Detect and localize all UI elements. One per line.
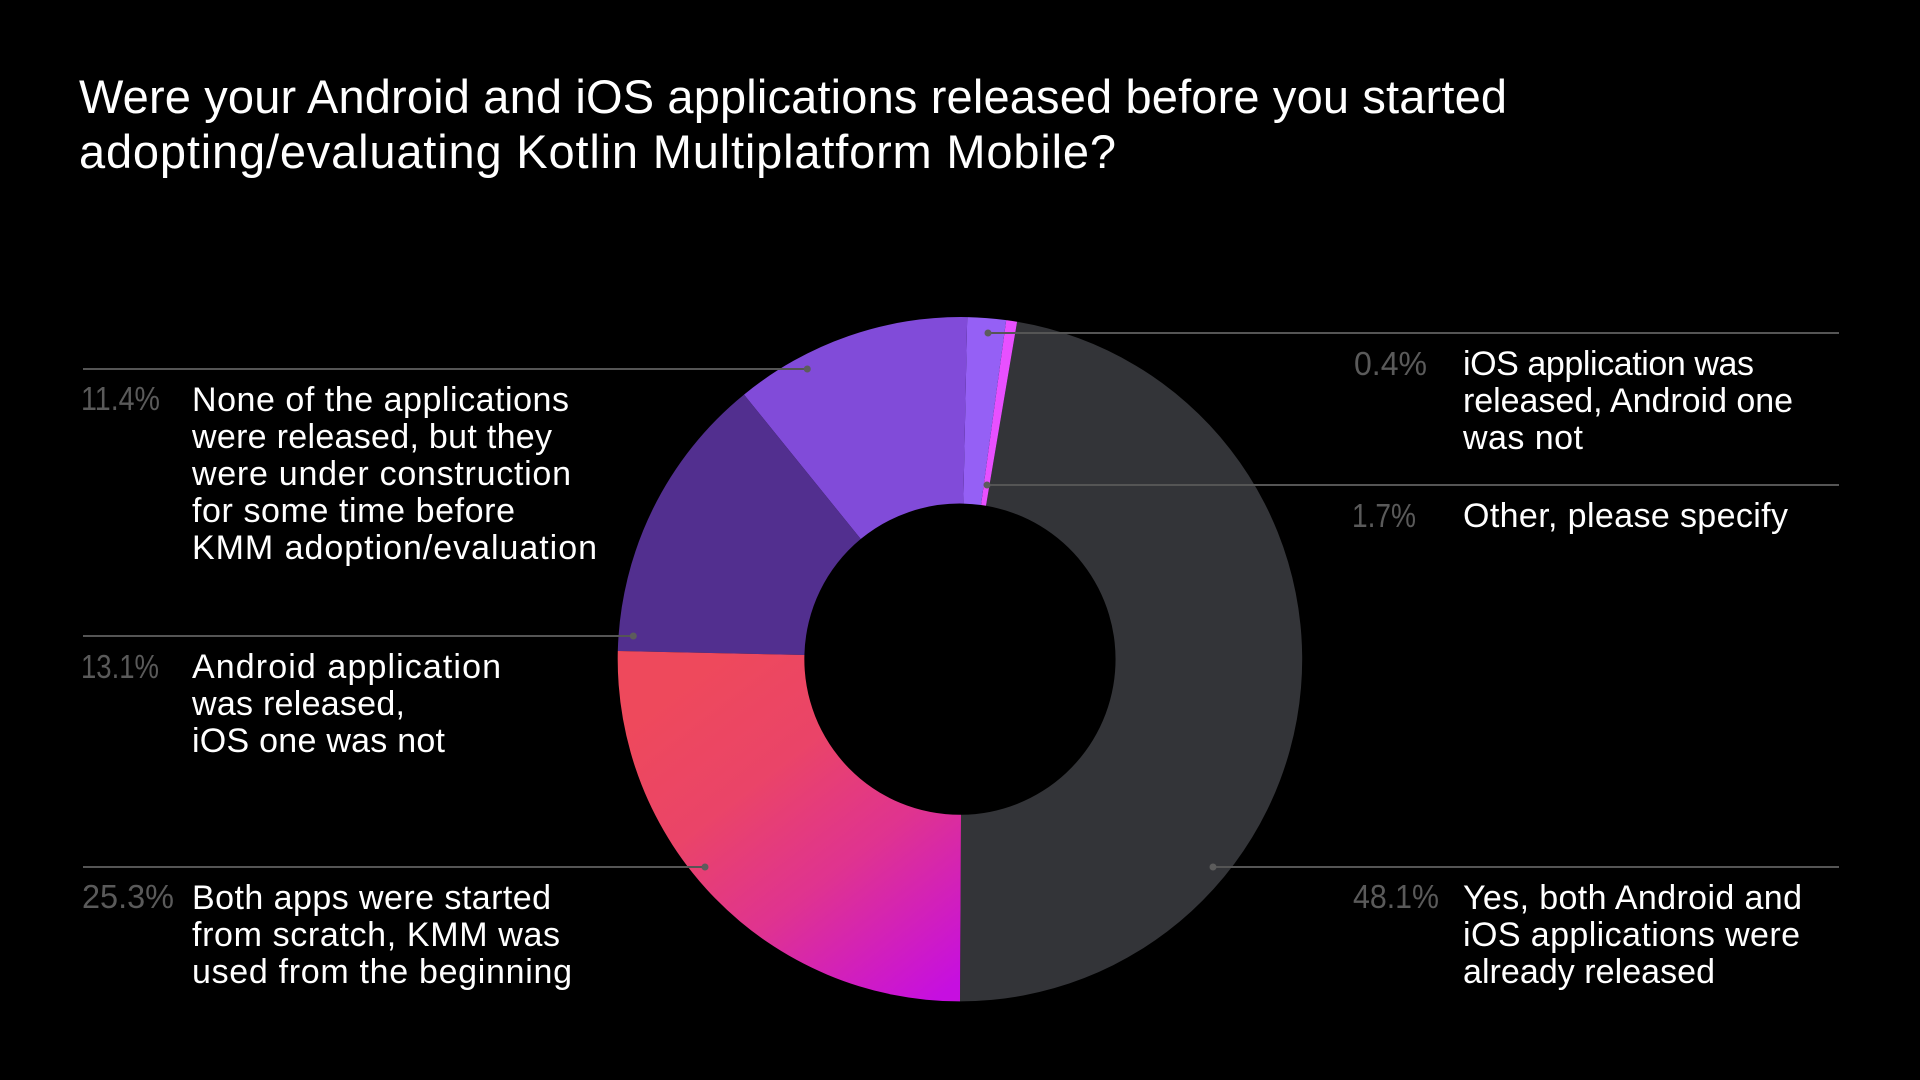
callout: 25.3%: used from the beginning bbox=[192, 953, 572, 991]
slice: yes, both released 48.1% bbox=[960, 322, 1302, 1001]
callout: 48.1%: Yes, both Android and bbox=[1463, 879, 1802, 917]
callout: 11.4% bbox=[81, 366, 811, 567]
callout: 1.7% bbox=[984, 482, 1839, 535]
title: Were your Android and iOS applications released before you started bbox=[79, 70, 1507, 123]
slice: under construction 11.4% bbox=[744, 317, 967, 539]
callout: 25.3%: from scratch, KMM was bbox=[192, 916, 560, 954]
slice: Android released 13.1% bbox=[618, 395, 861, 655]
callout: 48.1% bbox=[1210, 864, 1839, 991]
callout: 13.1%: was released, bbox=[191, 685, 405, 723]
callout: 11.4%: for some time before bbox=[192, 492, 515, 530]
callout: 11.4%: None of the applications bbox=[192, 381, 569, 419]
title bbox=[79, 70, 1507, 178]
callout: 11.4%: KMM adoption/evaluation bbox=[192, 529, 597, 567]
slice: iOS released 0.4% bbox=[981, 320, 1017, 506]
callout: 11.4%: were under construction bbox=[191, 455, 571, 493]
callout: 0.4%: iOS application was bbox=[1463, 345, 1754, 383]
callout: 25.3%: 25.3% bbox=[82, 878, 174, 915]
slice: other 1.7% bbox=[963, 317, 1006, 505]
callout: 11.4%: were released, but they bbox=[191, 418, 552, 456]
callout: 48.1%: already released bbox=[1463, 953, 1715, 991]
callout: 13.1%: iOS one was not bbox=[192, 722, 446, 760]
title: adopting/evaluating Kotlin Multiplatform Mobile? bbox=[79, 125, 1116, 178]
callout: 13.1%: 13.1% bbox=[81, 648, 159, 685]
callout: 13.1% bbox=[81, 632, 637, 760]
callout: 0.4%: was not bbox=[1462, 419, 1584, 457]
callout: 25.3%: Both apps were started bbox=[192, 879, 551, 917]
callout: 1.7%: 1.7% bbox=[1352, 497, 1416, 534]
callout: 1.7%: Other, please specify bbox=[1463, 497, 1788, 535]
callout: 13.1%: Android application bbox=[192, 648, 501, 686]
slice: from scratch 25.3% bbox=[618, 651, 961, 1001]
callout: 25.3% bbox=[82, 864, 708, 991]
callout: 48.1%: iOS applications were bbox=[1463, 916, 1800, 954]
callout: 48.1%: 48.1% bbox=[1353, 878, 1439, 915]
donut chart bbox=[618, 317, 1302, 1001]
callout: 11.4%: 11.4% bbox=[81, 380, 160, 417]
callout: 0.4%: 0.4% bbox=[1354, 345, 1427, 382]
callout: 0.4%: released, Android one bbox=[1463, 382, 1793, 420]
callout: 0.4% bbox=[984, 330, 1839, 457]
